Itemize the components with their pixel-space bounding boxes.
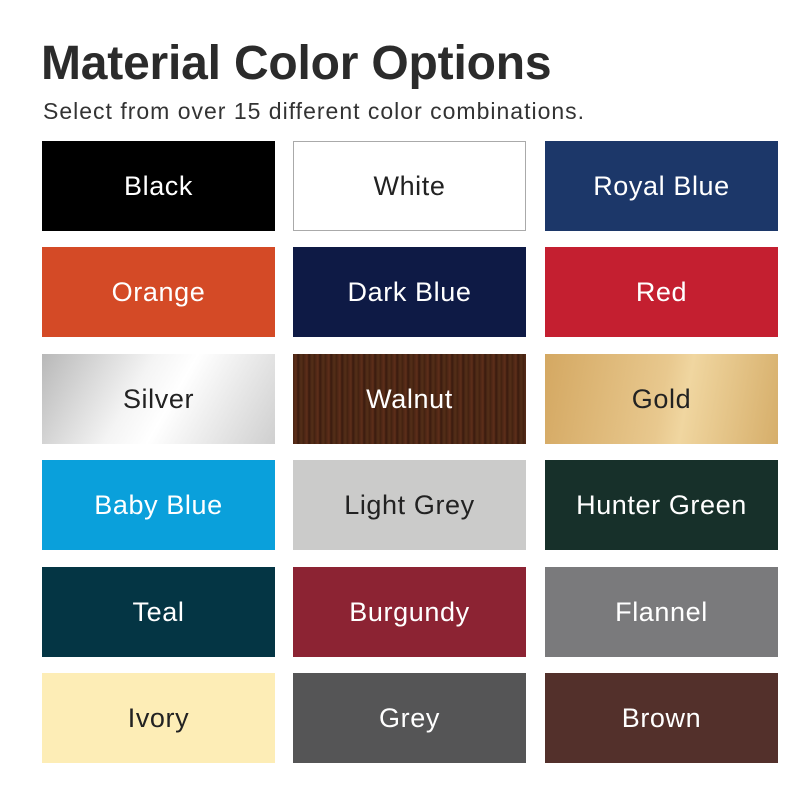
- title: Material Color Options: [41, 37, 551, 90]
- swatch: Hunter Green: Hunter Green: [576, 490, 747, 520]
- swatch: Flannel: [545, 567, 778, 657]
- swatch: Silver: [42, 354, 275, 444]
- swatch: Baby Blue: [42, 460, 275, 550]
- swatch: Silver: Silver: [123, 384, 194, 414]
- swatch: Burgundy: [293, 567, 526, 657]
- swatch: White: [293, 141, 526, 231]
- swatch: Royal Blue: [545, 141, 778, 231]
- subtitle: Select from over 15 different color combinations.: [43, 98, 585, 124]
- swatch: Brown: [545, 673, 778, 763]
- swatch: Grey: [293, 673, 526, 763]
- swatch: Black: [42, 141, 275, 231]
- swatch: Grey: Grey: [379, 702, 440, 732]
- swatch: White: White: [373, 170, 446, 200]
- swatch: Ivory: Ivory: [128, 702, 189, 732]
- swatch: Ivory: [42, 673, 275, 763]
- swatch: Dark Blue: Dark Blue: [348, 276, 471, 306]
- swatch: Gold: Gold: [632, 384, 691, 414]
- swatch: Teal: [42, 567, 275, 657]
- swatch: Brown: Brown: [622, 702, 701, 732]
- swatch: Walnut: [293, 354, 526, 444]
- swatch: Flannel: Flannel: [615, 596, 708, 626]
- swatch: Hunter Green: [545, 460, 778, 550]
- swatch: Walnut: Walnut: [366, 384, 453, 414]
- swatch: Orange: [42, 247, 275, 337]
- swatch: Gold: [545, 354, 778, 444]
- swatch: Royal Blue: Royal Blue: [593, 170, 730, 200]
- swatch: Baby Blue: Baby Blue: [94, 490, 223, 520]
- swatch: Black: Black: [124, 170, 193, 200]
- swatch: Dark Blue: [293, 247, 526, 337]
- swatch: Orange: Orange: [112, 276, 205, 306]
- swatch: Red: [545, 247, 778, 337]
- swatch: Teal: Teal: [133, 596, 184, 626]
- swatch: Red: Red: [636, 276, 687, 306]
- swatch: Light Grey: Light Grey: [344, 490, 475, 520]
- swatch: Burgundy: Burgundy: [349, 596, 470, 626]
- swatch: Light Grey: [293, 460, 526, 550]
